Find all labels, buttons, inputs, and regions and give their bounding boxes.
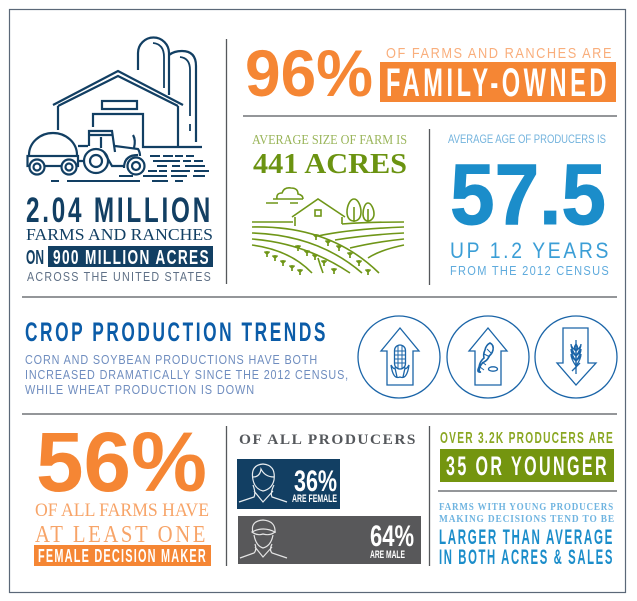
icon: corn up arrow [358,316,440,398]
stat: 96 percent family-owned [245,36,616,110]
panel: female producers: ARE FEMALE [292,493,337,505]
stat: 96 percent family-owned: 96% [245,36,373,110]
panel: male producers: ARE MALE [370,549,405,561]
icon: male head with cap [240,520,287,558]
stat: 56 percent female decision maker: AT LEAST ONE [35,522,208,548]
stat: average producer age [448,132,611,278]
label: on 900 million acres: 900 MILLION ACRES [53,247,210,269]
panel: male producers [238,516,421,564]
stat: average farm size: AVERAGE SIZE OF FARM IS [252,133,407,148]
stat: average farm size [252,133,407,180]
stat: average producer age: UP 1.2 YEARS [450,238,611,263]
stat: average producer age: FROM THE 2012 CENSUS [450,263,610,278]
text: crop production description: WHILE WHEAT PRODUCTION IS DOWN [25,383,255,397]
headline: 2.04 million: 2.04 MILLION [26,191,213,230]
icon: farm landscape [252,188,404,275]
stat: 56 percent female decision maker: 56% [36,415,207,509]
text: crop production description: INCREASED DRAMATICALLY SINCE THE 2012 CENSUS, [25,368,349,382]
icon: peanut up arrow [447,316,529,398]
text: young producer farm size [439,501,615,569]
panel: male producers: 64% [370,520,414,553]
label: on 900 million acres [26,246,213,269]
stat: 56 percent female decision maker [34,415,211,566]
text: across the United States: ACROSS THE UNITED STATES [27,269,212,284]
panel: female producers [237,459,340,509]
stat: average farm size: 441 ACRES [253,149,407,180]
heading: crop production trends: CROP PRODUCTION TRENDS [25,317,328,347]
text: crop production description [25,353,349,397]
stat: 56 percent female decision maker: FEMALE DECISION MAKER [38,546,207,566]
stat: average producer age: 57.5 [450,147,606,243]
stat: young producers [440,430,614,482]
icon: wheat down arrow [535,316,617,398]
text: farms and ranches: FARMS AND RANCHES [26,225,213,244]
stat: 56 percent female decision maker: OF ALL FARMS HAVE [35,500,209,521]
icon: barn, silos and tractor [28,37,209,181]
label: on 900 million acres: ON [26,247,44,269]
icon: female head [239,464,287,502]
text: crop production description: CORN AND SOYBEAN PRODUCTIONS HAVE BOTH [25,353,318,367]
panel: female producers: 36% [294,465,337,498]
heading: of all producers: OF ALL PRODUCERS [239,432,417,448]
